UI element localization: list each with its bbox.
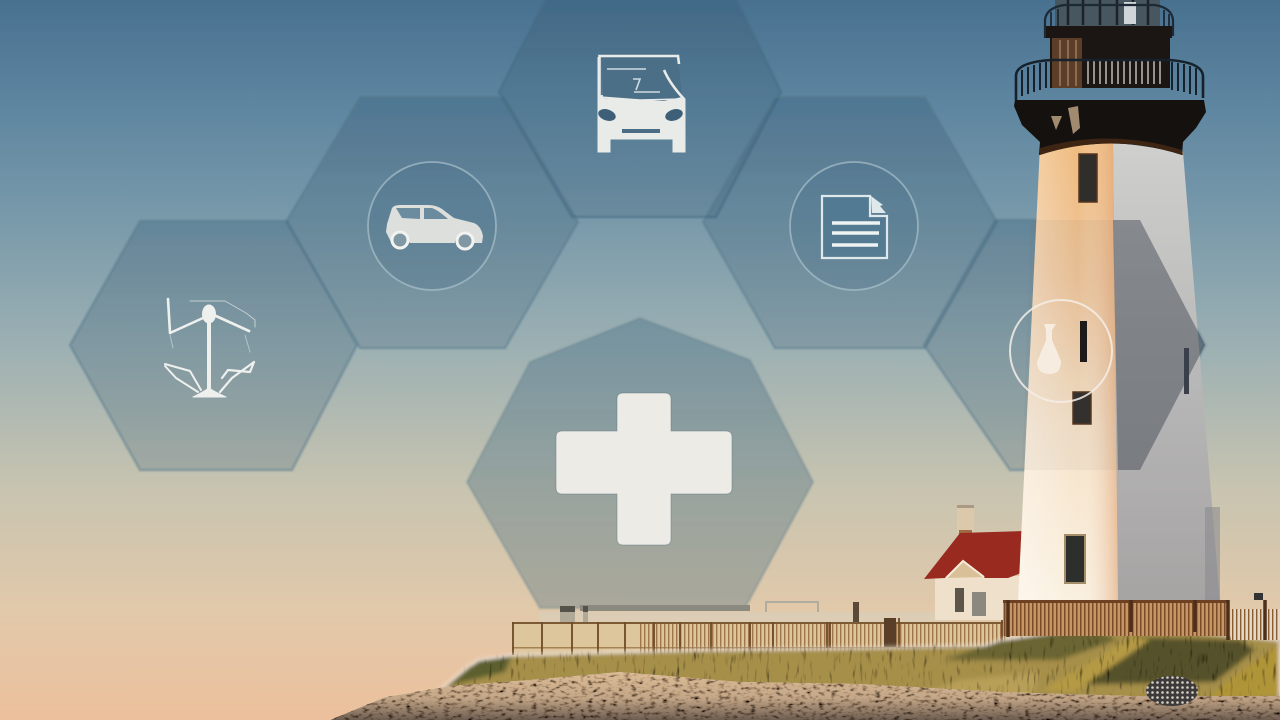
- distant structure behind fence: [540, 602, 950, 623]
- hill: rocks: [330, 672, 1280, 720]
- icon: balance scales: [165, 299, 255, 397]
- house wall: [935, 576, 1027, 620]
- chimney: [957, 505, 974, 538]
- lamp room: [1055, 0, 1160, 26]
- hexagon: right, behind lighthouse: [924, 220, 1205, 470]
- lower gallery railing: [1016, 60, 1203, 100]
- buttress: [1205, 507, 1220, 602]
- base window: [1065, 535, 1085, 583]
- icon: medical cross: [556, 393, 732, 545]
- upper window: [1079, 154, 1097, 202]
- lower small window: [1073, 392, 1091, 424]
- hexagon: document: [703, 97, 997, 348]
- hexagon: medical cross: [467, 318, 813, 608]
- hexagon: car: [286, 97, 578, 348]
- upper deck railing: [1045, 5, 1173, 38]
- lantern room: [1050, 36, 1170, 88]
- icon: circle ring: [368, 162, 496, 290]
- icon: circle ring: [790, 162, 918, 290]
- lighthouse: [1014, 0, 1220, 602]
- tower: lit side: [1018, 142, 1118, 602]
- gable: [946, 561, 984, 578]
- left fence: [512, 612, 1007, 655]
- middle window: [1080, 321, 1087, 362]
- icon: vehicle front view: [597, 56, 685, 152]
- icon: flask: [1037, 324, 1061, 374]
- right fence: [1003, 593, 1280, 640]
- net-covered rock: [1146, 676, 1198, 706]
- hexagon overlay on tower: [1010, 220, 1205, 470]
- hexagon: scales: [70, 221, 357, 470]
- lantern corbel: [1014, 100, 1206, 155]
- hill: grass: [440, 625, 1280, 712]
- icon: hatchback car: [386, 205, 483, 249]
- icon: ring: [1010, 300, 1112, 402]
- hexagon: truck front: [499, 0, 781, 217]
- red roof: [924, 531, 1024, 579]
- keeper house: [924, 505, 1027, 620]
- tower: shaded side: [1113, 142, 1220, 602]
- icon: document page: [822, 196, 887, 258]
